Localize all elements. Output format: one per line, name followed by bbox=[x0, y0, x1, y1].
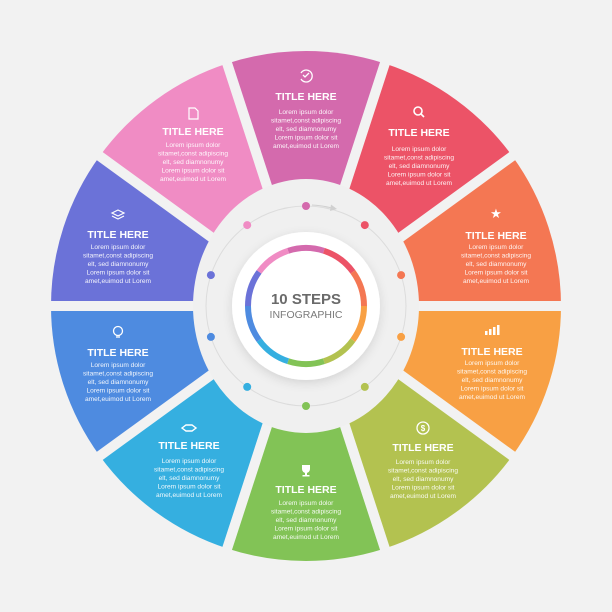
icon: document bbox=[189, 108, 198, 119]
step 8 blue: sitamet,const adipiscing bbox=[83, 370, 153, 378]
step 5 yellow-green: Lorem ipsum dolor sit bbox=[391, 484, 455, 492]
icon: refresh check bbox=[301, 70, 312, 82]
step 1 top: sitamet,const adipiscing bbox=[271, 118, 341, 124]
step 9 indigo: elt, sed diamnonumy bbox=[88, 261, 149, 268]
step 10 pink: sitamet,const adipiscing bbox=[158, 150, 228, 158]
step 2 red: Lorem ipsum dolor sit bbox=[387, 172, 451, 178]
step 10 pink: elt, sed diamnonumy bbox=[163, 159, 224, 166]
step 5 yellow-green: elt, sed diamnonumy bbox=[393, 476, 454, 483]
step 5 yellow-green: amet,euimod ut Lorem bbox=[390, 493, 456, 500]
step 4 orange: Lorem ipsum dolor sit bbox=[460, 386, 524, 392]
center badge: 10 STEPS bbox=[271, 291, 341, 308]
icon: star: ★ bbox=[490, 206, 502, 221]
segment ring bbox=[46, 51, 566, 561]
step 7 cyan: Lorem ipsum dolor sit bbox=[157, 484, 221, 490]
step 4 orange: amet,euimod ut Lorem bbox=[459, 394, 525, 401]
step 8 blue: Lorem ipsum dolor sit bbox=[86, 388, 150, 394]
step 5 yellow-green: sitamet,const adipiscing bbox=[388, 468, 458, 474]
icon: trophy bbox=[302, 465, 310, 476]
step 5 yellow-green: Lorem ipsum dolor bbox=[396, 459, 451, 466]
step 1 top bbox=[271, 70, 341, 150]
step 5 yellow-green bbox=[388, 422, 458, 500]
step 2 red bbox=[384, 107, 454, 187]
step 6 green: Lorem ipsum dolor bbox=[279, 500, 334, 507]
step 6 green: amet,euimod ut Lorem bbox=[273, 534, 339, 541]
step 10 pink bbox=[158, 108, 228, 183]
step 8 blue: elt, sed diamnonumy bbox=[88, 379, 149, 386]
step 2 red: TITLE HERE bbox=[388, 127, 450, 139]
step 7 cyan: elt, sed diamnonumy bbox=[159, 475, 220, 482]
step 10 pink: Lorem ipsum dolor bbox=[166, 142, 221, 149]
icon: chart bbox=[485, 325, 500, 335]
step 1 top: TITLE HERE bbox=[275, 91, 337, 103]
step 4 orange bbox=[457, 325, 527, 401]
step 9 indigo: sitamet,const adipiscing bbox=[83, 252, 153, 260]
step 3 orange-red: Lorem ipsum dolor sit bbox=[464, 270, 528, 276]
center badge: INFOGRAPHIC bbox=[270, 309, 343, 321]
step 7 cyan: TITLE HERE bbox=[158, 440, 220, 452]
step 7 cyan bbox=[154, 425, 224, 499]
step 4 orange: sitamet,const adipiscing bbox=[457, 368, 527, 376]
step 4 orange: TITLE HERE bbox=[461, 346, 523, 358]
step 3 orange-red: Lorem ipsum dolor bbox=[469, 244, 524, 251]
step 1 top: Lorem ipsum dolor bbox=[279, 109, 334, 116]
step 7 cyan: Lorem ipsum dolor bbox=[162, 458, 217, 465]
step 9 indigo: Lorem ipsum dolor sit bbox=[86, 270, 150, 276]
step 7 cyan: amet,euimod ut Lorem bbox=[156, 492, 222, 499]
step 9 indigo: TITLE HERE bbox=[87, 229, 149, 241]
step 5 yellow-green: TITLE HERE bbox=[392, 442, 454, 454]
step 3 orange-red bbox=[461, 206, 531, 285]
step 8 blue: amet,euimod ut Lorem bbox=[85, 396, 151, 403]
step 6 green: sitamet,const adipiscing bbox=[271, 508, 341, 516]
icon: handshake bbox=[182, 425, 196, 431]
step 6 green: elt, sed diamnonumy bbox=[276, 517, 337, 524]
step 8 blue bbox=[83, 326, 153, 403]
step 3 orange-red: sitamet,const adipiscing bbox=[461, 252, 531, 260]
step 2 red: sitamet,const adipiscing bbox=[384, 154, 454, 162]
step 10 pink: amet,euimod ut Lorem bbox=[160, 176, 226, 183]
step 2 red: Lorem ipsum dolor bbox=[392, 146, 447, 153]
step 3 orange-red: elt, sed diamnonumy bbox=[466, 261, 527, 268]
step 1 top: amet,euimod ut Lorem bbox=[273, 143, 339, 150]
icon: bulb bbox=[114, 326, 122, 337]
inner gray disc bbox=[193, 179, 419, 433]
icon: dollar: $ bbox=[421, 424, 426, 433]
step 6 green: TITLE HERE bbox=[275, 484, 337, 496]
step 4 orange: elt, sed diamnonumy bbox=[462, 377, 523, 384]
step 4 orange: Lorem ipsum dolor bbox=[465, 360, 520, 367]
icon: search bbox=[414, 107, 424, 117]
step 8 blue: TITLE HERE bbox=[87, 347, 149, 359]
step 3 orange-red: TITLE HERE bbox=[465, 230, 527, 242]
step 10 pink: Lorem ipsum dolor sit bbox=[161, 168, 225, 174]
step 1 top: elt, sed diamnonumy bbox=[276, 126, 337, 133]
step 2 red: elt, sed diamnonumy bbox=[389, 163, 450, 170]
center badge bbox=[232, 232, 380, 380]
step 3 orange-red: amet,euimod ut Lorem bbox=[463, 278, 529, 285]
step 10 pink: TITLE HERE bbox=[162, 126, 224, 138]
icon: layers bbox=[112, 210, 124, 219]
step 1 top: Lorem ipsum dolor sit bbox=[274, 134, 338, 142]
step 8 blue: Lorem ipsum dolor bbox=[91, 362, 146, 369]
step 9 indigo: amet,euimod ut Lorem bbox=[85, 278, 151, 285]
step 7 cyan: sitamet,const adipiscing bbox=[154, 466, 224, 474]
step 9 indigo: Lorem ipsum dolor bbox=[91, 244, 146, 251]
step 6 green: Lorem ipsum dolor sit bbox=[274, 526, 338, 532]
step 9 indigo bbox=[83, 210, 153, 285]
step 6 green bbox=[271, 465, 341, 541]
step 2 red: amet,euimod ut Lorem bbox=[386, 180, 452, 187]
dot ring bbox=[206, 202, 406, 410]
